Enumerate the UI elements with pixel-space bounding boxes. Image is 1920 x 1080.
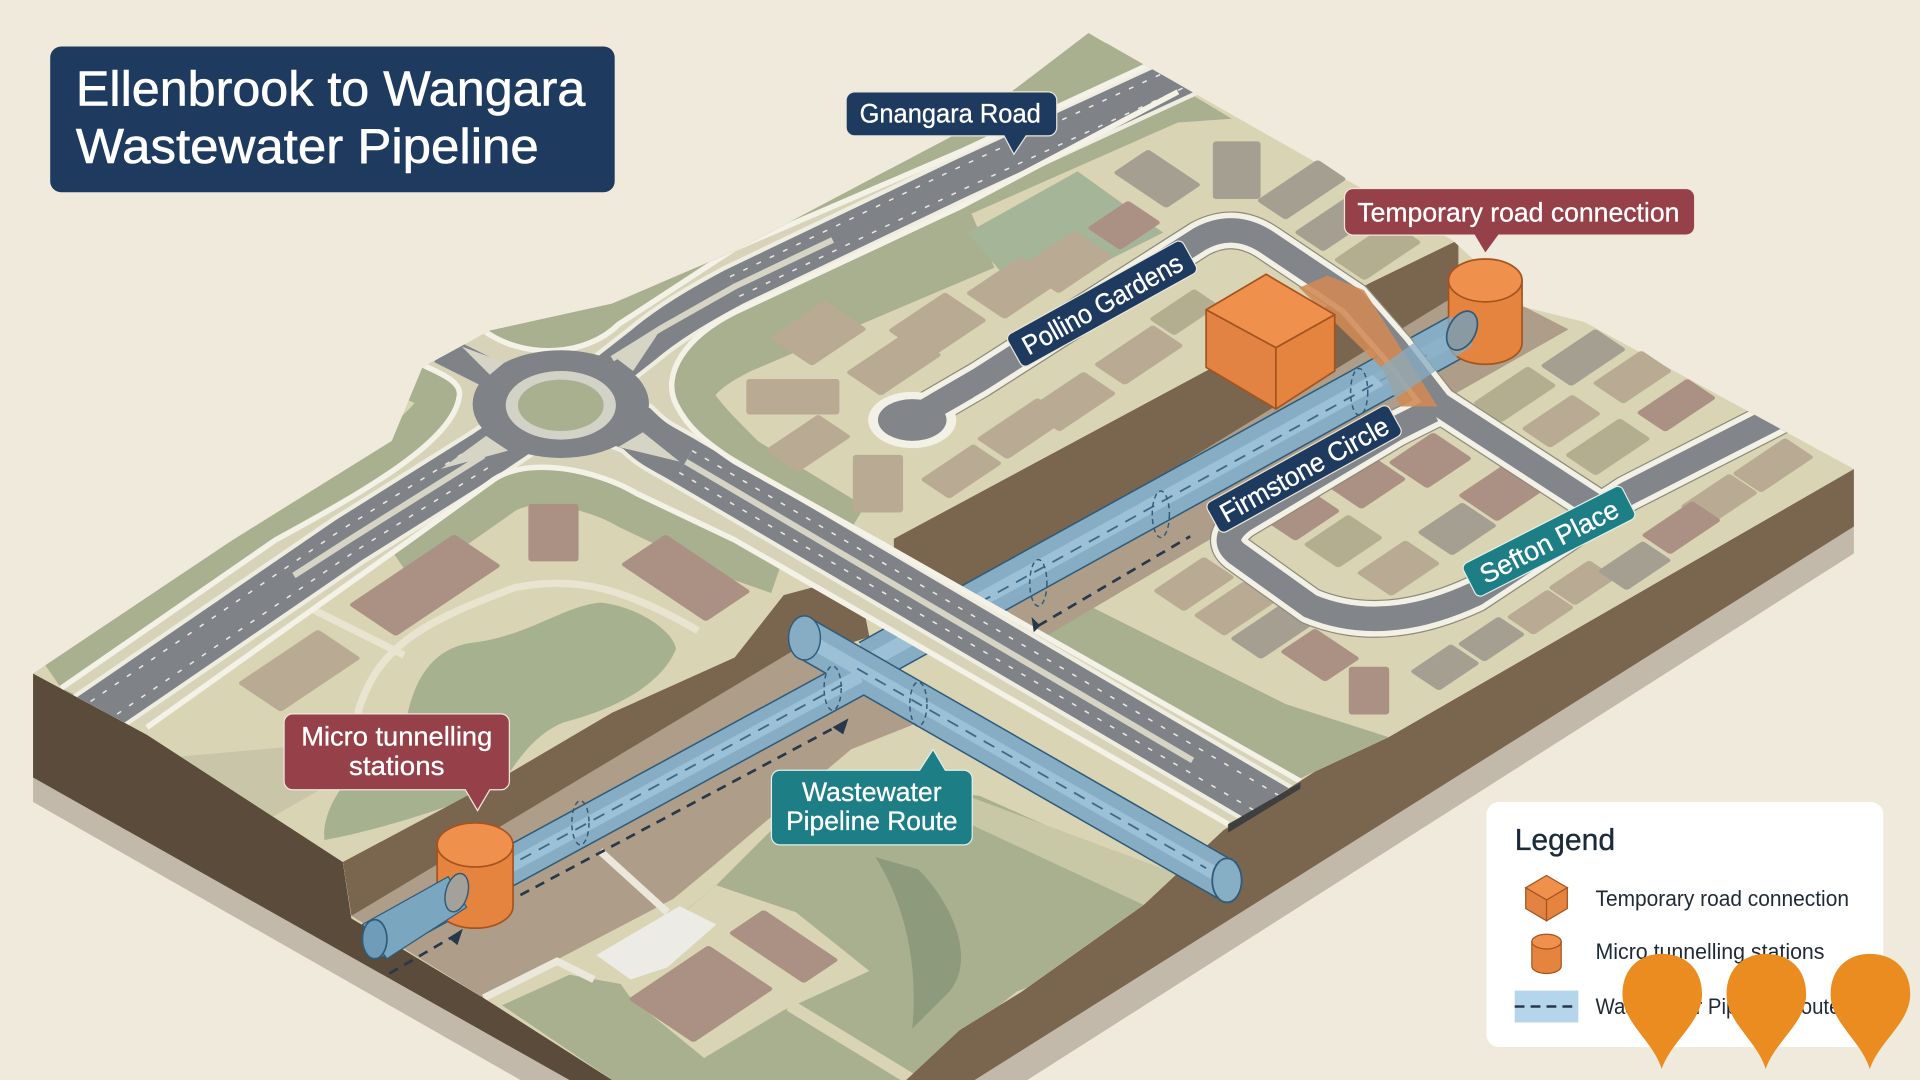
title: Ellenbrook to Wangara xyxy=(76,62,586,116)
street label: Sefton Place: Sefton Place xyxy=(1475,494,1624,590)
icon: micro tunnelling station far end xyxy=(1449,259,1522,364)
roundabout xyxy=(473,350,649,458)
Gnangara Road network and roundabout xyxy=(61,64,1300,824)
green bands between roads and lots xyxy=(967,171,1163,276)
legend: Legend xyxy=(1515,823,1615,857)
pipe end at far station xyxy=(1371,306,1484,398)
callout: Wastewater Pipeline Route: Pipeline Route xyxy=(786,806,958,836)
pipe stub in front of near station xyxy=(362,871,472,959)
dashed route arrows xyxy=(520,536,1190,895)
legend xyxy=(1487,802,1883,1047)
legend icon: cube xyxy=(1526,876,1567,921)
icon: map pin 3 xyxy=(1831,954,1910,1069)
pipeline: lower section and cross section xyxy=(373,616,1242,940)
legend: Wastewater Pipeline Route xyxy=(1596,994,1840,1019)
access road lower trench xyxy=(484,851,667,998)
trench walls and floor xyxy=(343,576,869,916)
road end cut xyxy=(1228,782,1300,833)
legend: Temporary road connection xyxy=(1596,886,1849,911)
title xyxy=(50,47,615,192)
callout: Wastewater Pipeline Route xyxy=(771,749,972,845)
icon: map pin 2 xyxy=(1727,954,1806,1069)
legend icon: pipeline xyxy=(1515,991,1578,1022)
houses xyxy=(243,144,1809,1039)
street label: Firmstone Circle: Firmstone Circle xyxy=(1215,411,1394,529)
green bottom field xyxy=(502,795,1170,1080)
pipeline: upper section under Gnangara Road xyxy=(869,333,1463,661)
callout: Temporary road connection: Temporary road connection xyxy=(1357,198,1679,228)
icon: micro tunnelling station near end xyxy=(437,823,513,928)
temporary road connection strip xyxy=(1299,276,1438,407)
lots around lower houses xyxy=(612,885,869,1058)
callout: Temporary road connection xyxy=(1344,189,1695,253)
icon: temporary road connection cube xyxy=(1206,274,1335,409)
cul-de-sac xyxy=(868,387,967,448)
local roads: Pollino Gardens, Firmstone Circle, Sefton Place xyxy=(868,230,1800,619)
callout: Wastewater Pipeline Route: Wastewater xyxy=(802,777,942,807)
legend icon: cylinder xyxy=(1532,934,1561,973)
callout: Gnangara Road: Gnangara Road xyxy=(860,98,1041,128)
callout: Micro tunnelling stations: Micro tunnelling xyxy=(301,722,492,752)
splitter islands xyxy=(441,334,680,469)
street label: Pollino Gardens: Pollino Gardens xyxy=(1017,248,1188,361)
terrain walls xyxy=(33,469,1854,1080)
green top-left and top corner xyxy=(491,33,1232,330)
callout: Micro tunnelling stations xyxy=(284,714,509,811)
callout: Gnangara Road xyxy=(846,92,1057,154)
icon: map pin 1 xyxy=(1622,954,1702,1069)
green verge along roads xyxy=(61,64,1151,688)
callout: Micro tunnelling stations: stations xyxy=(349,751,444,781)
dashed arrow near station xyxy=(389,932,460,973)
legend: Micro tunnelling stations xyxy=(1596,939,1824,964)
block shadow xyxy=(33,520,1854,1080)
park xyxy=(324,602,676,840)
title: Wastewater Pipeline xyxy=(76,120,539,174)
